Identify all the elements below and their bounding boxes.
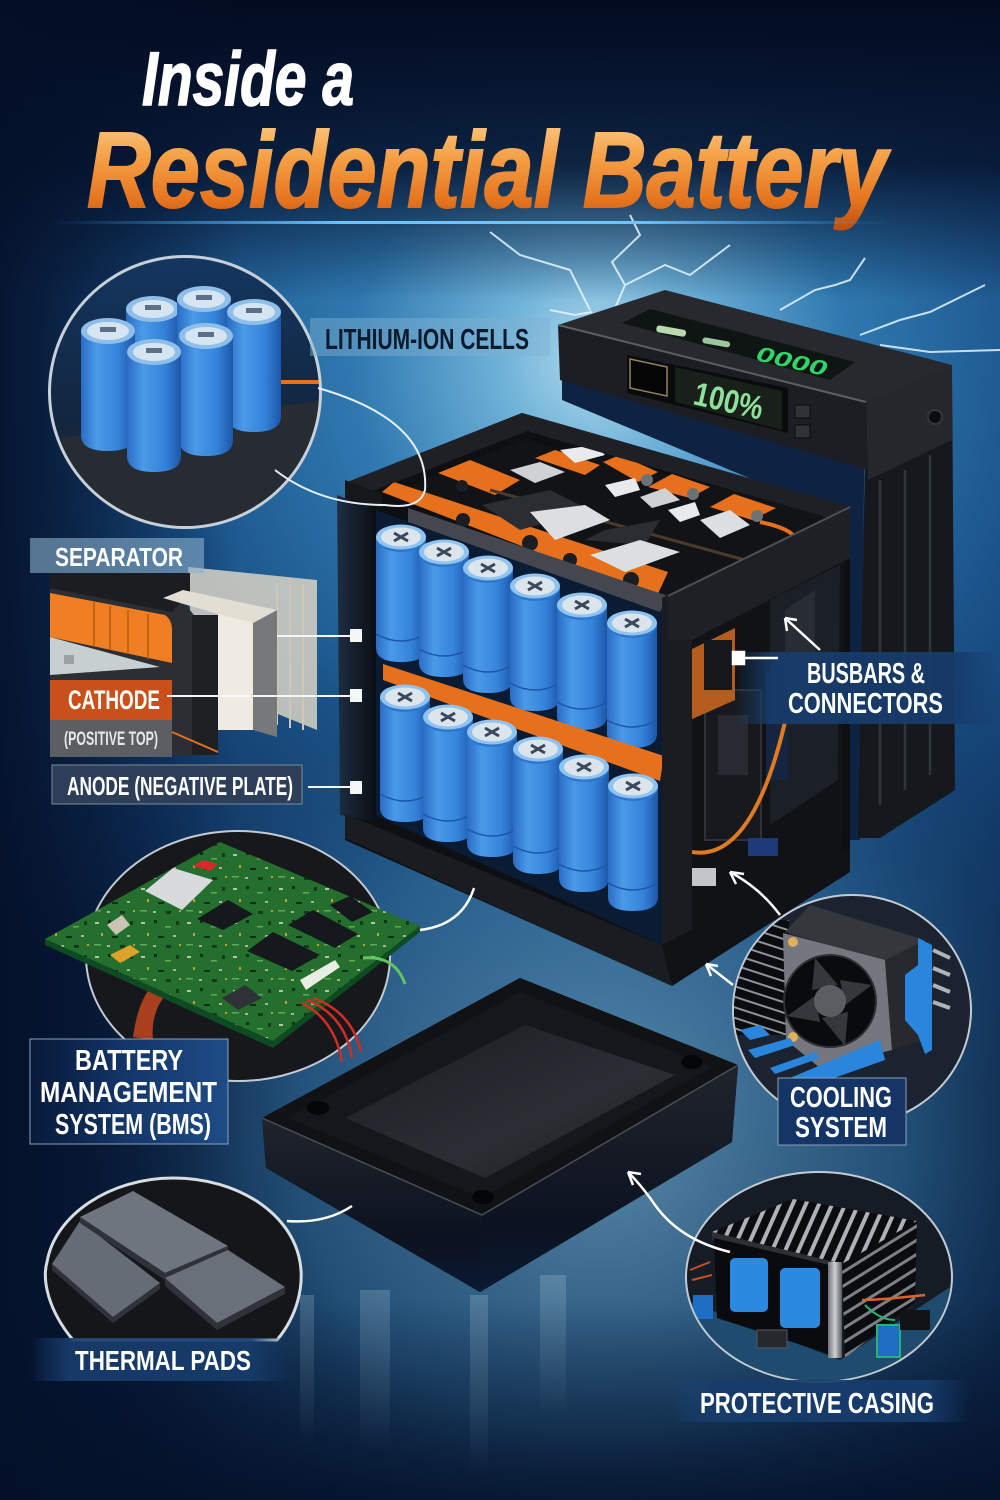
display: 100 percent: 100% (690, 375, 767, 427)
inset: BMS circuit board (45, 830, 420, 1090)
label: thermal pads: THERMAL PADS (75, 1345, 251, 1376)
label: thermal pads (30, 1338, 290, 1381)
label: separator (30, 538, 204, 573)
label: anode (52, 765, 302, 804)
label: lithium-ion cells: LITHIUM-ION CELLS (325, 324, 529, 356)
label: separator: SEPARATOR (55, 542, 183, 572)
arrows: cooling (706, 872, 780, 985)
label: anode: ANODE (NEGATIVE PLATE) (67, 771, 293, 801)
label: cooling system: SYSTEM (795, 1112, 887, 1144)
inset: protective casing (685, 1171, 953, 1386)
inset: electrode layers (30, 538, 317, 757)
inner cell bay (375, 510, 662, 945)
lightning bolts (490, 215, 1000, 352)
label: protective casing: PROTECTIVE CASING (700, 1388, 934, 1420)
label: lithium-ion cells (310, 318, 550, 356)
label: BMS: BATTERY (75, 1045, 183, 1077)
main battery frame (337, 413, 850, 986)
frame posts (337, 413, 850, 986)
label: positive top: (POSITIVE TOP) (64, 729, 158, 750)
leaders: electrode layers (167, 630, 361, 793)
status display (622, 309, 855, 381)
callout: BMS leader (420, 888, 474, 930)
arrows: busbars (733, 618, 820, 664)
arrow: casing (628, 1172, 730, 1252)
orange shelf (383, 664, 664, 781)
title (50, 37, 891, 230)
separator sheets (188, 567, 317, 737)
label: BMS: SYSTEM (BMS) (55, 1109, 211, 1141)
upper row of cells (376, 524, 657, 748)
inset: lithium-ion cells (48, 255, 325, 530)
title: Inside a (142, 37, 354, 122)
inset: cooling system (732, 890, 972, 1130)
label: busbars and connectors (735, 652, 1000, 724)
label: BMS (30, 1039, 228, 1144)
display: 100 percent (627, 355, 810, 438)
status display: 0000 (754, 342, 830, 381)
inset: thermal pads (45, 1178, 301, 1340)
right side compartment (690, 530, 845, 945)
callout: cells leader (275, 388, 425, 506)
callout: thermal pad leader (287, 1206, 352, 1221)
label: BMS: MANAGEMENT (40, 1077, 217, 1109)
label: cooling system: COOLING (790, 1082, 892, 1114)
label: busbars and connectors: BUSBARS & (807, 658, 925, 690)
open tray casing (262, 978, 738, 1292)
label: busbars and connectors: CONNECTORS (788, 688, 943, 720)
label: protective casing (670, 1380, 970, 1422)
busbar tray (382, 440, 836, 612)
back battery unit (558, 290, 955, 840)
label: cooling system (778, 1078, 906, 1145)
lower row of cells (380, 684, 658, 911)
label: cathode: CATHODE (68, 685, 160, 715)
